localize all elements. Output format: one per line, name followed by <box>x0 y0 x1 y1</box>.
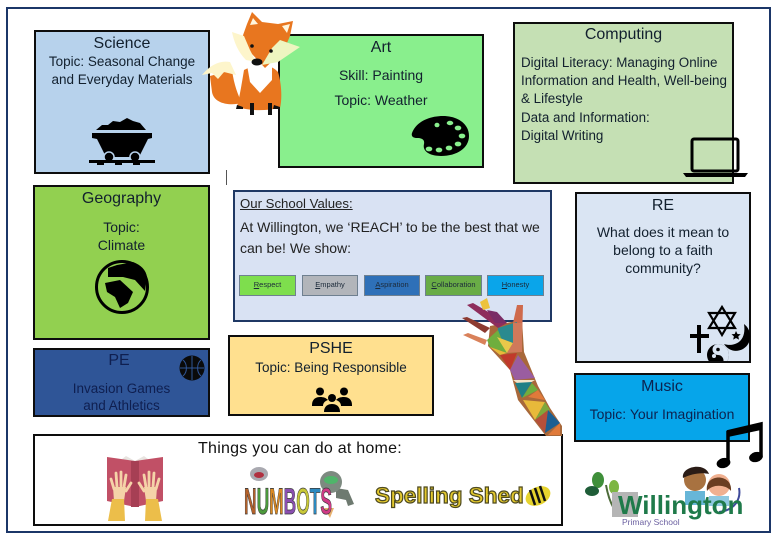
text: reach statement: can be! We show: <box>240 240 351 256</box>
value: collaboration: Collaboration <box>431 280 476 289</box>
text: science topic: Topic: Seasonal Change <box>49 54 195 69</box>
panel: re <box>575 192 751 363</box>
value: honesty: Honesty <box>502 280 529 289</box>
heading: pshe: PSHE <box>309 340 353 357</box>
logo: numbots <box>244 467 354 522</box>
text: pshe topic: Topic: Being Responsible <box>255 360 407 375</box>
value: aspiration <box>364 275 420 296</box>
heading: music: Music <box>641 378 683 395</box>
logo: spelling shed: Spelling Shed <box>375 483 524 508</box>
text: re question: community? <box>625 260 701 276</box>
text: re question <box>597 224 729 276</box>
panel: music <box>574 373 750 442</box>
value: empathy <box>302 275 358 296</box>
illustration: colourful hand <box>462 298 562 436</box>
text: computing topics <box>521 55 727 143</box>
heading: science: Science <box>94 35 150 52</box>
panel: science <box>34 30 210 174</box>
text: music topic: Topic: Your Imagination <box>590 406 734 422</box>
text: science topic <box>49 54 195 87</box>
panel: school values <box>233 190 552 322</box>
text: geography topic <box>98 219 145 253</box>
logo: willington primary school <box>585 466 743 527</box>
icon: basketball <box>180 356 204 380</box>
icon: palette <box>412 116 469 156</box>
illustration: tree and children <box>585 466 740 517</box>
text: computing topics: Data and Information: <box>521 110 650 125</box>
illustration: fox <box>202 12 300 115</box>
heading: computing: Computing <box>585 26 662 43</box>
text: science topic: and Everyday Materials <box>51 72 193 87</box>
heading: art: Art <box>371 39 391 56</box>
text: reach statement <box>240 219 540 256</box>
icon: globe <box>95 260 149 314</box>
text: computing topics: Digital Writing <box>521 128 603 143</box>
icon: mine cart <box>89 118 155 165</box>
value: respect: Respect <box>254 280 281 289</box>
panel: pshe <box>228 335 434 416</box>
text: geography topic: Climate <box>98 237 145 253</box>
heading: our school values: Our School Values: <box>240 196 353 211</box>
text: pe topic: and Athletics <box>83 398 160 413</box>
panel: pe <box>33 348 210 417</box>
icon: music notes <box>716 422 763 468</box>
text: re question: belong to a faith <box>613 242 713 258</box>
icon: laptop <box>683 138 748 177</box>
logo: numbots: NUMBOTS <box>244 481 332 522</box>
heading: things you can do at home: Things you can do at home: <box>198 440 402 457</box>
panel: geography <box>33 185 210 340</box>
panel: things to do at home <box>33 434 563 526</box>
value: aspiration: Aspiration <box>375 280 409 289</box>
text: primary school: Primary School <box>622 517 680 527</box>
icon: book and hands <box>107 456 163 521</box>
value: honesty <box>487 275 544 296</box>
icon: faith symbols <box>690 305 750 361</box>
text: art skill: Skill: Painting <box>339 67 423 83</box>
value: collaboration <box>425 275 482 296</box>
icon: bee <box>526 486 550 506</box>
text: pe topic <box>73 381 170 413</box>
panel: computing <box>513 22 734 184</box>
text: re question: What does it mean to <box>597 224 729 240</box>
heading: re: RE <box>652 197 674 214</box>
panel: art <box>278 34 484 168</box>
heading: geography: Geography <box>82 190 161 207</box>
illustration: cursor line <box>226 170 227 185</box>
heading: pe: PE <box>108 352 130 369</box>
text: reach statement: At Willington, we ‘REACH’ to be the best that we <box>240 219 540 235</box>
text: geography topic: Topic: <box>103 219 140 235</box>
text: pe topic: Invasion Games <box>73 381 170 396</box>
value: empathy: Empathy <box>315 280 345 289</box>
text: computing topics: Digital Literacy: Managing Online <box>521 55 718 70</box>
text: computing topics: & Lifestyle <box>521 91 583 106</box>
value: respect <box>239 275 296 296</box>
icon: people <box>312 388 352 412</box>
text: computing topics: Information and Health, Well-being <box>521 73 727 88</box>
text: art topic: Topic: Weather <box>334 92 428 108</box>
text: willington: Willington <box>618 490 743 520</box>
